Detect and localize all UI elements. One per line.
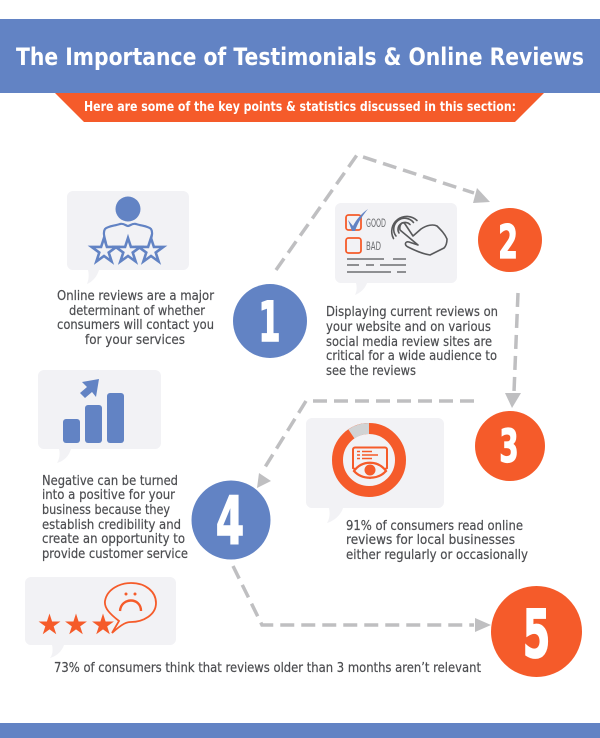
text: step 5: 73% of consumers think that reviews older than 3 months aren’t relevant [54,661,481,676]
icon: three orange stars [39,614,114,634]
text: step 1: for your services [85,333,185,348]
step 2 number badge [478,208,542,272]
text: step 2: social media review sites are [326,335,492,350]
step 4 number badge: 4 [216,483,244,560]
text: step 4: business because they [42,503,170,518]
text: step 3: either regularly or occasionally [346,548,528,563]
panel: step 1 bubble and icon [67,191,189,284]
subtitle ribbon [55,93,544,122]
step 3 number badge [475,411,545,481]
text: step 2: see the reviews [326,364,416,379]
text: step 2: critical for a wide audience to [326,349,497,364]
text: step 1: consumers will contact you [57,318,214,333]
panel: step 2 bubble and icon [335,203,457,295]
step 5 number badge [491,586,582,677]
text: step 1: determinant of whether [69,304,206,319]
icon: document with eye [353,448,387,478]
text: step 2: your website and on various [326,320,491,335]
subtitle text: Here are some of the key points & statistics discussed in this section: [84,100,516,115]
step 5 number badge: 5 [523,595,550,673]
text: step 3: reviews for local businesses [346,533,515,548]
icon: sad face speech bubble [105,583,156,633]
text: step 3 [346,519,528,563]
text: step 4 [42,474,188,562]
text: step 4: Negative can be turned [42,474,178,489]
step 3 number badge: 3 [499,420,519,473]
icon: rising bar chart with arrow [63,379,124,443]
footer bar [0,723,600,738]
panel: step 3 bubble and icon [306,418,444,523]
icon: good and bad checkboxes: GOOD [366,216,386,230]
icon: good and bad checkboxes: BAD [366,239,381,253]
icon: pointing hand with touch rings [392,216,447,255]
arrow: step 1 to step 2 [276,155,490,270]
text: step 2 [326,305,498,379]
donut chart: 91 percent [338,428,400,492]
icon: good and bad checkboxes [346,209,406,272]
text: step 3: 91% of consumers read online [346,519,523,534]
panel: step 5 bubble and icon [25,577,176,658]
arrow: step 3 to step 4 [257,401,474,488]
text: step 2: Displaying current reviews on [326,305,498,320]
arrow: step 4 to step 5 [233,566,491,632]
arrow: step 2 to step 3 [505,293,521,408]
step 2 number badge: 2 [498,216,518,270]
icon: person with three stars [92,196,163,262]
panel: step 4 bubble and icon [38,370,161,463]
text: step 4: create an opportunity to [42,532,185,547]
step 4 number badge [192,480,270,560]
step 1 number badge [233,284,307,358]
step 1 number badge: 1 [258,290,281,354]
text: step 1: Online reviews are a major [57,289,215,304]
text: step 4: establish credibility and [42,518,181,533]
header banner [0,19,600,93]
text: step 4: into a positive for your [42,488,176,503]
text: step 1 [57,289,215,348]
text: step 4: provide customer service [42,547,188,562]
